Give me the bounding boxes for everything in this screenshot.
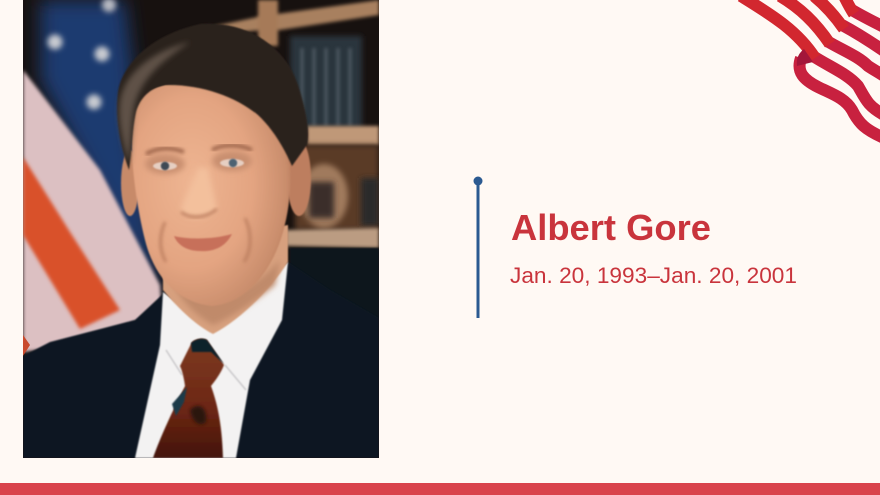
american flag: [23, 0, 165, 356]
jacket: [23, 262, 379, 458]
term dates: Jan. 20, 1993–Jan. 20, 2001: [510, 263, 797, 288]
shirt collar: [135, 262, 288, 458]
icon: flag ribbon: [741, 0, 880, 138]
ribbon fold: [797, 49, 813, 66]
name heading: Albert Gore: [511, 207, 711, 248]
ears: [121, 150, 139, 216]
photo backdrop: [23, 0, 379, 458]
neck: [163, 225, 288, 334]
eyes and brows: [145, 146, 252, 174]
collar fold: [166, 350, 246, 390]
cheek creases: [161, 218, 250, 262]
hair: [117, 24, 308, 170]
timeline marker: [474, 176, 482, 318]
hair highlight: [119, 42, 190, 164]
portrait photo: [23, 0, 379, 458]
face: [131, 82, 290, 306]
bottom bar: [0, 483, 880, 495]
chin shadow: [180, 264, 282, 325]
necktie: [153, 339, 224, 458]
mouth: [174, 234, 232, 251]
nose: [181, 168, 217, 218]
bookshelf: [215, 0, 379, 318]
